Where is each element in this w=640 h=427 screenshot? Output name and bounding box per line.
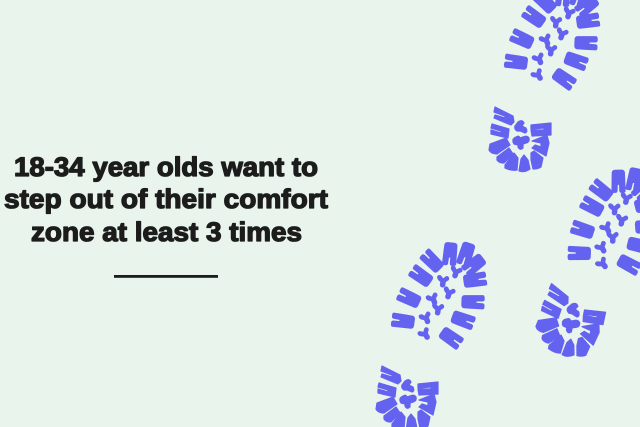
icon: boot heel lower middle [531, 282, 609, 362]
icon: boot sole right edge [559, 165, 640, 283]
title [4, 152, 328, 247]
icon: boot sole centre [391, 242, 487, 350]
title: zone at least 3 times [31, 217, 302, 247]
title: step out of their comfort [4, 184, 328, 214]
footprints [376, 0, 640, 427]
title underline rule [114, 275, 218, 278]
title: 18-34 year olds want to [14, 152, 318, 182]
icon: boot heel top [489, 107, 551, 172]
icon: boot heel bottom left [376, 366, 438, 427]
icon: boot sole top right [504, 0, 600, 91]
